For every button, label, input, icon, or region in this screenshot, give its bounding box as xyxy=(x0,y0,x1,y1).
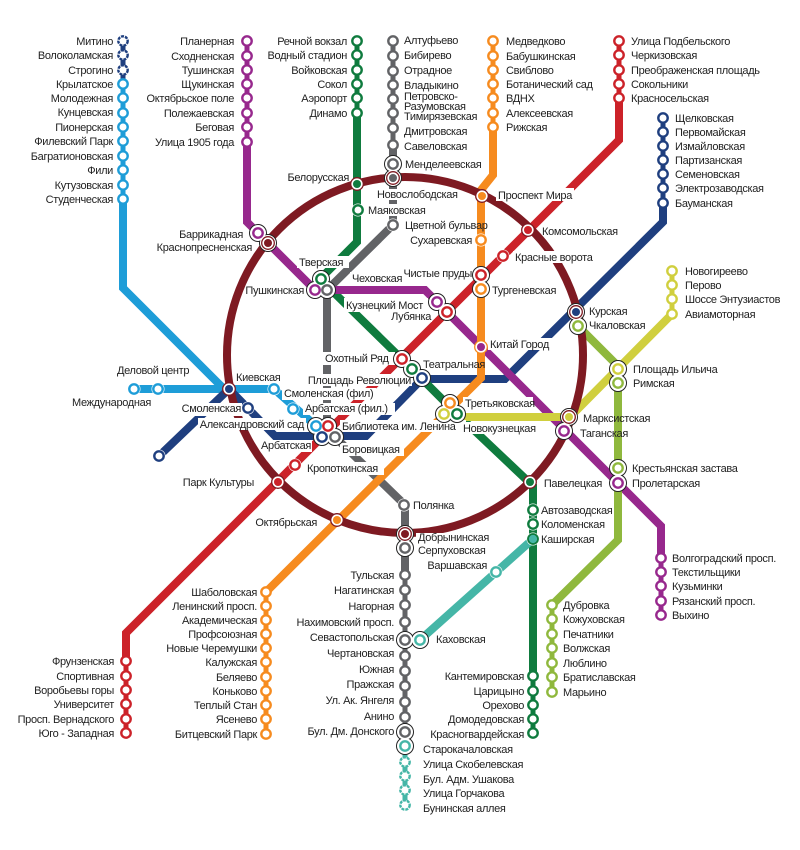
labels: east branches: Текстильщики xyxy=(672,567,740,579)
labels: north branches: Черкизовская xyxy=(631,50,697,62)
central labels: Библиотека им. Ленина xyxy=(342,421,457,433)
labels: north branches: Сокольники xyxy=(631,79,688,91)
labels: south branches: Царицыно xyxy=(473,686,524,698)
labels: north-west branches: Молодежная xyxy=(51,93,113,105)
labels: north-west branches: Кунцевская xyxy=(58,107,113,119)
central labels: Смоленская (фил) xyxy=(284,388,373,400)
central labels: Добрынинская xyxy=(418,532,489,544)
labels: north branches: Разумовская xyxy=(404,101,466,113)
central labels: Арбатская xyxy=(261,440,311,452)
line: Serpukhovskaya grey xyxy=(327,41,405,732)
central labels: Баррикадная xyxy=(179,229,243,241)
stations: Kashirskaya with teal centre xyxy=(528,534,538,544)
labels: north branches xyxy=(404,35,760,153)
labels: north-west branches: Фили xyxy=(87,165,113,177)
central labels: Китай Город xyxy=(490,339,550,351)
labels: north branches: Ботанический сад xyxy=(506,79,594,91)
labels: east branches: Перово xyxy=(685,280,721,292)
labels: north-west branches: Тушинская xyxy=(182,65,234,77)
labels: south branches: Люблино xyxy=(563,658,607,670)
central labels: Кузнецкий Мост xyxy=(346,300,423,312)
central labels: Арбатская (фил.) xyxy=(305,403,388,415)
central labels xyxy=(72,159,739,646)
central labels: Площадь Революции xyxy=(308,375,411,387)
central labels: Белорусская xyxy=(287,172,349,184)
labels: north-west branches xyxy=(31,36,347,206)
labels: north-west branches: Кутузовская xyxy=(55,180,113,192)
labels: north branches: Отрадное xyxy=(404,65,452,77)
labels: south branches: Бул. Дм. Донского xyxy=(308,726,394,738)
labels: south branches: Бунинская аллея xyxy=(423,803,506,815)
central labels: Коломенская xyxy=(541,519,605,531)
central labels: Цветной бульвар xyxy=(405,220,488,232)
central labels: Автозаводская xyxy=(541,505,613,517)
interchange outlines xyxy=(128,156,626,754)
labels: north-west branches: Речной вокзал xyxy=(277,36,347,48)
central labels: Новокузнецкая xyxy=(463,423,536,435)
labels: east branches: Авиамоторная xyxy=(685,309,756,321)
central labels: Менделеевская xyxy=(405,159,482,171)
central labels: Красные ворота xyxy=(515,252,594,264)
labels: south branches: Улица Горчакова xyxy=(423,788,506,800)
labels: south branches: Нахимовский просп. xyxy=(296,617,394,629)
labels: south branches: Битцевский Парк xyxy=(175,729,258,741)
labels: north-west branches: Студенческая xyxy=(46,194,113,206)
labels: north-west branches: Пионерская xyxy=(55,122,113,134)
central labels: Тургеневская xyxy=(492,285,556,297)
central labels: Новослободская xyxy=(377,189,458,201)
labels: south branches: Орехово xyxy=(482,700,524,712)
central labels: Парк Культуры xyxy=(183,477,254,489)
labels: north branches: Красносельская xyxy=(631,93,709,105)
labels: south branches: Пражская xyxy=(346,679,394,691)
labels: east branches: Щелковская xyxy=(675,113,734,125)
labels: north-west branches: Улица 1905 года xyxy=(155,137,235,149)
central labels: Чеховская xyxy=(352,273,402,285)
central labels: Римская xyxy=(633,378,675,390)
labels: south branches: Дубровка xyxy=(563,600,610,612)
central labels: Таганская xyxy=(580,428,628,440)
stations: ring interchanges with filled centres xyxy=(223,172,582,540)
labels: south branches xyxy=(18,570,636,815)
stations: light blue xyxy=(118,79,321,431)
line: Kakhovskaya teal xyxy=(420,539,533,640)
central labels: Смоленская xyxy=(182,403,241,415)
labels: east branches: Кузьминки xyxy=(672,581,723,593)
labels: south branches: Беляево xyxy=(216,672,257,684)
line: Tagansko-Krasnopresnenskaya purple xyxy=(247,41,661,615)
central labels: Павелецкая xyxy=(544,478,602,490)
labels: south branches: Теплый Стан xyxy=(194,700,257,712)
labels: north branches: Тимирязевская xyxy=(404,111,478,123)
labels: south branches: Коньково xyxy=(212,686,257,698)
labels: north-west branches: Филевский Парк xyxy=(34,136,114,148)
labels: north branches: Владыкино xyxy=(404,80,459,92)
central labels: Площадь Ильича xyxy=(633,364,719,376)
labels: south branches: Ясенево xyxy=(216,714,257,726)
stations: purple xyxy=(242,36,666,620)
central labels: Краснопресненская xyxy=(157,242,252,254)
line: Filyovskaya light blue xyxy=(123,41,316,426)
labels: north branches: Свиблово xyxy=(506,65,554,77)
labels: south branches: Южная xyxy=(359,664,394,676)
labels: south branches: Кожуховская xyxy=(563,614,625,626)
line: Kalininskaya yellow xyxy=(445,271,672,417)
labels: north branches: Рижская xyxy=(506,122,548,134)
labels: north branches: ВДНХ xyxy=(506,93,535,105)
stations: light green xyxy=(547,321,623,697)
labels: south branches: Новые Черемушки xyxy=(166,643,257,655)
line: Sokolnicheskaya red xyxy=(126,41,619,733)
central labels: Каховская xyxy=(436,634,486,646)
labels: east branches: Новогиреево xyxy=(685,266,748,278)
stations: dark blue xyxy=(154,113,668,461)
central labels: Деловой центр xyxy=(117,365,189,377)
central labels: Охотный Ряд xyxy=(325,353,390,365)
stations: teal xyxy=(400,567,501,751)
labels: south branches: Просп. Вернадского xyxy=(18,714,114,726)
central labels: Сухаревская xyxy=(410,235,472,247)
labels: south branches: Марьино xyxy=(563,687,606,699)
labels: south branches: Севастопольская xyxy=(310,632,394,644)
central labels: Проспект Мира xyxy=(498,190,573,202)
central labels: Боровицкая xyxy=(342,444,400,456)
labels: south branches: Ул. Ак. Янгеля xyxy=(326,695,394,707)
labels: south branches: Кантемировская xyxy=(445,671,524,683)
labels: north branches: Бабушкинская xyxy=(506,51,576,63)
stations: grey xyxy=(322,36,410,737)
stations: yellow xyxy=(439,266,677,419)
labels: south branches: Калужская xyxy=(205,657,257,669)
labels: north branches: Улица Подбельского xyxy=(631,36,730,48)
central labels: Чкаловская xyxy=(589,320,646,332)
stations: orange xyxy=(261,36,498,739)
central labels: Пролетарская xyxy=(632,478,700,490)
labels: south branches: Шаболовская xyxy=(191,587,257,599)
labels: north-west branches: Строгино xyxy=(68,65,113,77)
stations: dark blue dashed Mitino branch xyxy=(118,36,128,75)
labels: north-west branches: Водный стадион xyxy=(268,50,347,62)
line: Koltsevaya maroon ring xyxy=(227,177,583,533)
central labels: Международная xyxy=(72,397,151,409)
labels: north branches: Алексеевская xyxy=(506,108,573,120)
labels: south branches: Фрунзенская xyxy=(52,656,114,668)
labels: north-west branches: Сходненская xyxy=(171,51,234,63)
white label backgrounds cutting the lines xyxy=(180,188,598,544)
labels: south branches: Спортивная xyxy=(56,671,114,683)
labels: east branches: Партизанская xyxy=(675,155,742,167)
labels: south branches: Чертановская xyxy=(327,648,394,660)
labels: south branches: Университет xyxy=(54,699,114,711)
labels: south branches: Воробьевы горы xyxy=(34,685,114,697)
labels: north branches: Петровско- xyxy=(404,91,458,103)
labels: south branches: Красногвардейская xyxy=(430,729,524,741)
central labels: Маяковская xyxy=(368,205,426,217)
central labels: Октябрьская xyxy=(255,517,317,529)
central labels: Крестьянская застава xyxy=(632,463,739,475)
labels: north-west branches: Крылатское xyxy=(56,79,113,91)
labels: east branches: Электрозаводская xyxy=(675,183,764,195)
central labels: Курская xyxy=(589,306,628,318)
labels: east branches xyxy=(672,113,781,622)
labels: south branches: Профсоюзная xyxy=(188,629,257,641)
central labels: Полянка xyxy=(413,500,455,512)
labels: north-west branches: Октябрьское поле xyxy=(147,93,234,105)
labels: east branches: Шоссе Энтузиастов xyxy=(685,294,781,306)
central labels: Кропоткинская xyxy=(307,463,378,475)
labels: south branches: Печатники xyxy=(563,629,614,641)
labels: south branches: Анино xyxy=(364,711,394,723)
labels: north branches: Медведково xyxy=(506,36,565,48)
stations: teal dashed Butovo branch xyxy=(400,757,410,810)
labels: north-west branches: Волоколамская xyxy=(38,50,113,62)
labels: south branches: Ленинский просп. xyxy=(172,601,257,613)
labels: south branches: Бул. Адм. Ушакова xyxy=(423,774,515,786)
labels: north branches: Бибирево xyxy=(404,50,451,62)
labels: south branches: Юго - Западная xyxy=(38,728,114,740)
line: Kaluzhsko-Rizhskaya orange xyxy=(266,41,493,734)
central labels: Каширская xyxy=(541,534,595,546)
central labels: Александровский сад xyxy=(200,419,305,431)
labels: south branches: Братиславская xyxy=(563,672,636,684)
labels: north-west branches: Полежаевская xyxy=(164,108,234,120)
labels: north-west branches: Беговая xyxy=(195,122,234,134)
labels: south branches: Нагатинская xyxy=(334,585,394,597)
stations: red xyxy=(121,36,624,738)
labels: north-west branches: Войковская xyxy=(291,65,347,77)
labels: north-west branches: Сокол xyxy=(317,79,347,91)
labels: south branches: Старокачаловская xyxy=(423,744,513,756)
central labels: Киевская xyxy=(236,372,281,384)
labels: east branches: Первомайская xyxy=(675,127,746,139)
labels: north-west branches: Багратионовская xyxy=(31,151,113,163)
line: Butovskaya teal link xyxy=(402,746,408,805)
central labels: Комсомольская xyxy=(542,226,618,238)
labels: north-west branches: Щукинская xyxy=(181,79,234,91)
central labels: Лубянка xyxy=(391,311,432,323)
labels: east branches: Волгоградский просп. xyxy=(672,553,776,565)
labels: east branches: Рязанский просп. xyxy=(672,596,756,608)
labels: east branches: Измайловская xyxy=(675,141,745,153)
central labels: Театральная xyxy=(423,359,485,371)
labels: east branches: Выхино xyxy=(672,610,709,622)
labels: north branches: Алтуфьево xyxy=(404,35,458,47)
central labels: Пушкинская xyxy=(245,285,304,297)
line: Zamoskvoretskaya green xyxy=(320,41,533,733)
labels: south branches: Нагорная xyxy=(348,601,394,613)
labels: south branches: Тульская xyxy=(350,570,394,582)
labels: south branches: Волжская xyxy=(563,643,610,655)
central labels: Чистые пруды xyxy=(403,268,472,280)
labels: north-west branches: Динамо xyxy=(310,108,347,120)
labels: north branches: Дмитровская xyxy=(404,126,468,138)
labels: south branches: Домодедовская xyxy=(448,714,524,726)
labels: north-west branches: Аэропорт xyxy=(301,93,347,105)
labels: north-west branches: Планерная xyxy=(180,36,234,48)
labels: east branches: Бауманская xyxy=(675,198,733,210)
labels: south branches: Улица Скобелевская xyxy=(423,759,524,771)
line: Arbatsko-Pokrovskaya dark blue xyxy=(159,118,663,456)
central labels: Марксистская xyxy=(583,413,651,425)
central labels: Третьяковская xyxy=(465,398,535,410)
central labels: Серпуховская xyxy=(418,545,486,557)
central labels: Тверская xyxy=(299,257,344,269)
labels: north branches: Преображенская площадь xyxy=(631,65,760,77)
stations: green xyxy=(316,36,538,738)
line: Lyublinskaya light green xyxy=(552,326,618,692)
central labels: Варшавская xyxy=(427,560,487,572)
labels: east branches: Семеновская xyxy=(675,169,740,181)
labels: north-west branches: Митино xyxy=(76,36,113,48)
labels: south branches: Академическая xyxy=(182,615,257,627)
labels: north branches: Савеловская xyxy=(404,141,467,153)
